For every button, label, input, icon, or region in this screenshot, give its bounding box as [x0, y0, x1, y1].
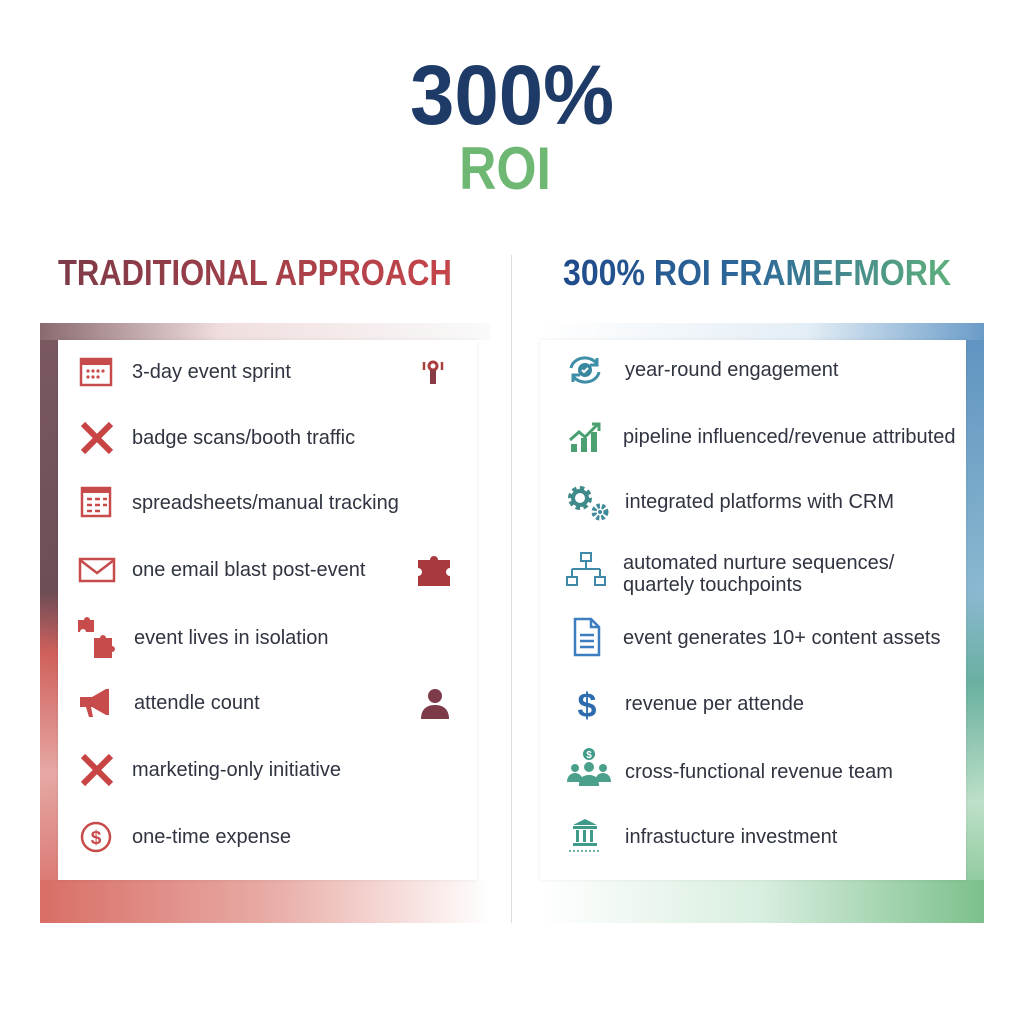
left item 8: $ — [91, 828, 102, 849]
left item 5: event lives in isolation — [134, 627, 329, 649]
left item 1 — [80, 358, 444, 386]
right item 5 — [574, 618, 940, 656]
left item 3: spreadsheets/manual tracking — [132, 492, 399, 514]
left item 4 — [78, 556, 450, 586]
left item 7 — [80, 754, 341, 786]
right item 3: integrated platforms with CRM — [625, 491, 894, 513]
left item 2: badge scans/booth traffic — [132, 427, 355, 449]
right item 2: pipeline influenced/revenue attributed — [623, 426, 955, 448]
right item 6: revenue per attende — [625, 693, 804, 715]
heading: 300% ROI framework: 300% ROI FRAMEFMORK — [563, 252, 951, 293]
left item 1: 3-day event sprint — [132, 361, 291, 383]
left item 8: one-time expense — [132, 826, 291, 848]
right item 5: event generates 10+ content assets — [623, 627, 940, 649]
right item 4: quartely touchpoints — [623, 574, 802, 596]
left item 7: marketing-only initiative — [132, 759, 341, 781]
right item 7: cross-functional revenue team — [625, 761, 893, 783]
right item 3 — [568, 486, 894, 520]
left item 4: one email blast post-event — [132, 559, 365, 581]
right item 4 — [566, 552, 894, 596]
right item 8 — [569, 819, 838, 852]
right item 2 — [569, 422, 955, 452]
right item 7 — [567, 748, 893, 786]
right item 7: $ — [586, 750, 592, 761]
left item 3 — [80, 486, 399, 518]
heading: traditional approach: TRADITIONAL APPROACH — [58, 252, 452, 293]
left item 2 — [80, 422, 355, 454]
left item 6: attendle count — [134, 692, 260, 714]
title: 300%: 300% — [410, 48, 614, 142]
right item 1 — [570, 356, 838, 384]
panel: ROI framework — [540, 323, 984, 923]
right item 1: year-round engagement — [625, 359, 838, 381]
panel: traditional approach — [40, 323, 478, 923]
right item 8: infrastucture investment — [625, 826, 837, 848]
left item 6 — [80, 689, 449, 719]
subtitle: ROI: ROI — [459, 135, 551, 202]
right item 6 — [578, 687, 804, 723]
left item 8 — [80, 822, 291, 852]
right item 4: automated nurture sequences/ — [623, 552, 894, 574]
left item 5 — [78, 617, 329, 658]
